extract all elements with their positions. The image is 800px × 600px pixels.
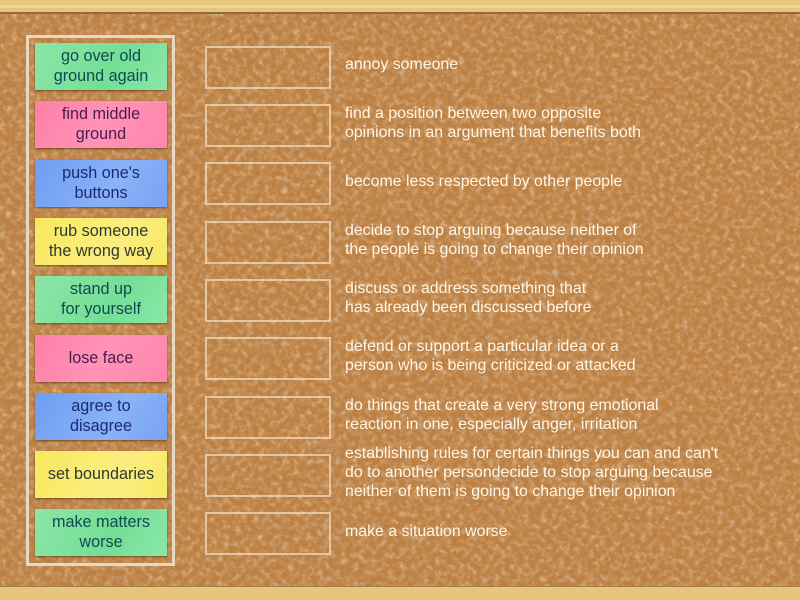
- drop box 7: [205, 396, 331, 439]
- tile: agree to disagree: [35, 393, 167, 440]
- tile: push one's buttons: [35, 160, 167, 207]
- definition 7: [345, 397, 659, 433]
- tile: find middle ground: ground: [76, 125, 126, 143]
- definition 1: annoy someone: [345, 56, 458, 73]
- definition 8: [345, 445, 718, 500]
- definition 2: opinions in an argument that benefits both: [345, 124, 641, 141]
- drop box 3: [205, 162, 331, 205]
- definition 8: establishing rules for certain things you can and can't: [345, 445, 718, 462]
- definition 5: discuss or address something that: [345, 280, 586, 297]
- tile: agree to disagree: disagree: [70, 417, 132, 435]
- definition 6: person who is being criticized or attacked: [345, 357, 636, 374]
- drop box 1: [205, 46, 331, 89]
- definition 8: do to another persondecide to stop arguing because: [345, 464, 713, 481]
- definition 5: has already been discussed before: [345, 299, 591, 316]
- tile: go over old ground again: ground again: [54, 67, 148, 85]
- definition 5: [345, 280, 591, 316]
- tile tray frame: [26, 35, 175, 566]
- tile: go over old ground again: [35, 43, 167, 90]
- drop box 4: [205, 221, 331, 264]
- definition 9: make a situation worse: [345, 523, 508, 540]
- tile: lose face: [35, 335, 167, 382]
- tile: rub someone the wrong way: [35, 218, 167, 265]
- definition 4: the people is going to change their opinion: [345, 241, 644, 258]
- drop box 5: [205, 279, 331, 322]
- tile: make matters worse: make matters: [52, 513, 150, 531]
- definition 2: find a position between two opposite: [345, 105, 601, 122]
- tile: set boundaries: set boundaries: [48, 465, 154, 483]
- drop box 8: [205, 454, 331, 497]
- definition 3: become less respected by other people: [345, 173, 622, 190]
- tile: stand up for yourself: [35, 276, 167, 323]
- tile: rub someone the wrong way: rub someone: [54, 222, 148, 240]
- definition 7: reaction in one, especially anger, irritation: [345, 416, 637, 433]
- tile: rub someone the wrong way: the wrong way: [49, 242, 153, 260]
- tile: stand up for yourself: stand up: [70, 280, 132, 298]
- definition 4: [345, 222, 644, 258]
- definition 6: defend or support a particular idea or a: [345, 338, 619, 355]
- definition 8: neither of them is going to change their opinion: [345, 483, 675, 500]
- definition 6: [345, 338, 636, 374]
- tile: find middle ground: [35, 101, 167, 148]
- definition 4: decide to stop arguing because neither of: [345, 222, 637, 239]
- tile: set boundaries: [35, 451, 167, 498]
- tile: push one's buttons: push one's: [62, 164, 140, 182]
- tile: make matters worse: [35, 509, 167, 556]
- drop box 9: [205, 512, 331, 555]
- definition 2: [345, 105, 641, 141]
- tile: agree to disagree: agree to: [71, 397, 131, 415]
- drop box 2: [205, 104, 331, 147]
- definition 7: do things that create a very strong emotional: [345, 397, 659, 414]
- tile: make matters worse: worse: [79, 533, 123, 551]
- tile: find middle ground: find middle: [62, 105, 140, 123]
- tile: lose face: lose face: [69, 349, 133, 367]
- tile: push one's buttons: buttons: [74, 184, 128, 202]
- tile: go over old ground again: go over old: [61, 47, 141, 65]
- drop box 6: [205, 337, 331, 380]
- tile: stand up for yourself: for yourself: [61, 300, 141, 318]
